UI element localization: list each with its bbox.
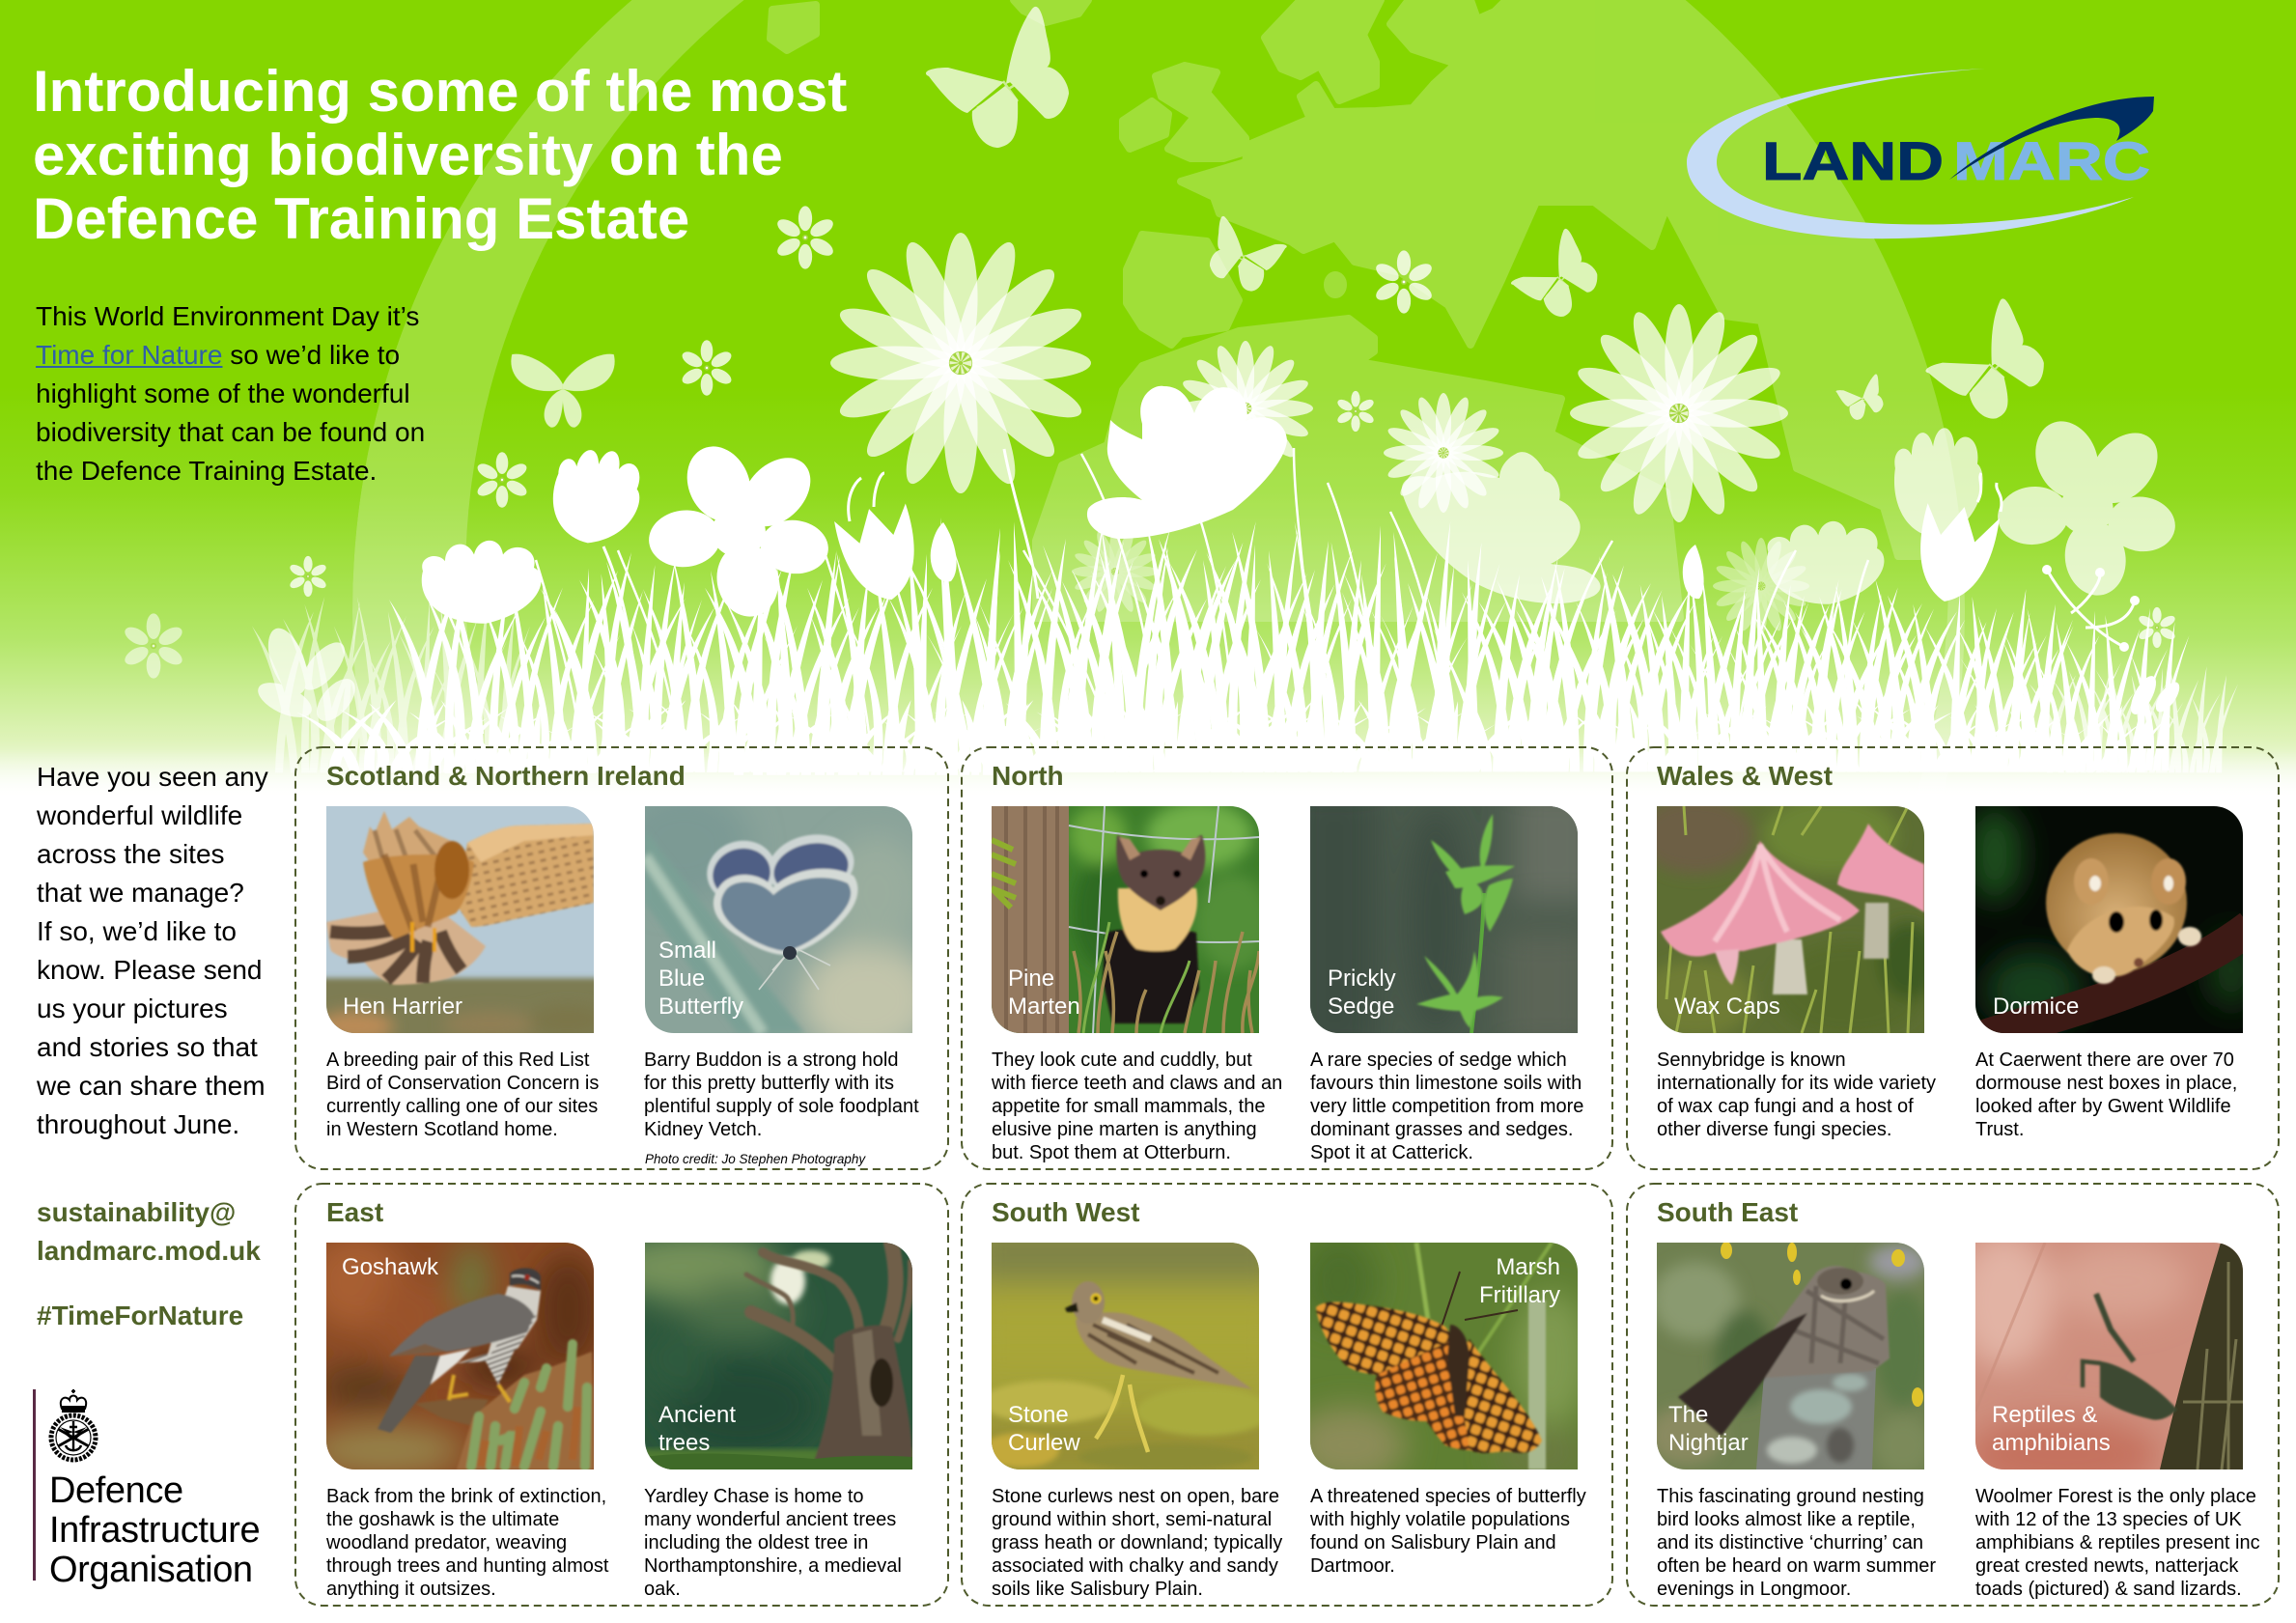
label: Wax Caps <box>1674 993 1780 1020</box>
description: Yardley Chase is home to <box>644 1486 864 1507</box>
panel: Scotland & Northern Ireland <box>294 746 2263 1170</box>
grass fade <box>0 748 2296 801</box>
Defence Infrastructure Organisation logo: Infrastructure <box>49 1510 260 1551</box>
label: Hen Harrier <box>343 993 462 1020</box>
Defence Infrastructure Organisation logo: Organisation <box>49 1550 253 1590</box>
title: Introducing some of the most <box>33 59 847 124</box>
small six-petal flowers <box>122 206 2177 679</box>
contact email: sustainability@ <box>37 1197 236 1227</box>
pale flowers <box>253 413 2180 728</box>
hero illustration <box>0 0 2296 792</box>
label: Nightjar <box>1668 1430 1749 1456</box>
description: They look cute and cuddly, but <box>992 1049 1252 1071</box>
description: woodland predator, weaving <box>326 1532 567 1553</box>
description: Northamptonshire, a medieval <box>644 1555 902 1577</box>
description <box>1310 1486 1586 1577</box>
description: with fierce teeth and claws and an <box>992 1073 1282 1094</box>
description: Back from the brink of extinction, <box>326 1486 606 1507</box>
description: elusive pine marten is anything <box>992 1119 1257 1140</box>
description: looked after by Gwent Wildlife <box>1975 1096 2231 1117</box>
call to action text: Have you seen any <box>37 762 268 792</box>
description <box>1657 1486 1936 1600</box>
description: often be heard on warm summer <box>1657 1555 1936 1577</box>
description <box>644 1486 902 1600</box>
title <box>33 59 847 251</box>
label: Reptiles & <box>1992 1402 2097 1428</box>
description: Stone curlews nest on open, bare <box>992 1486 1279 1507</box>
description <box>992 1486 1282 1600</box>
description: soils like Salisbury Plain. <box>992 1579 1203 1600</box>
description: At Caerwent there are over 70 <box>1975 1049 2234 1071</box>
description: Kidney Vetch. <box>644 1119 762 1140</box>
description: toads (pictured) & sand lizards. <box>1975 1579 2242 1600</box>
description: anything it outsizes. <box>326 1579 496 1600</box>
description: great crested newts, natterjack <box>1975 1555 2238 1577</box>
background gradient <box>0 0 2296 801</box>
label: Curlew <box>1008 1430 1080 1456</box>
photo: Wax Caps <box>1657 806 1924 1033</box>
description: A rare species of sedge which <box>1310 1049 1567 1071</box>
label <box>1008 1402 1080 1456</box>
intro text: biodiversity that can be found on <box>36 417 425 447</box>
description: appetite for small mammals, the <box>992 1096 1265 1117</box>
photo: Prickly Sedge <box>1310 806 1578 1033</box>
description: bird looks almost like a reptile, <box>1657 1509 1916 1530</box>
call to action text: us your pictures <box>37 993 228 1023</box>
call to action text: we can share them <box>37 1071 266 1101</box>
description: associated with chalky and sandy <box>992 1555 1278 1577</box>
description <box>1310 1049 1583 1163</box>
description: evenings in Longmoor. <box>1657 1579 1851 1600</box>
label: Prickly <box>1328 965 1396 992</box>
label: The <box>1668 1402 1708 1428</box>
photo: Ancient trees <box>645 1243 912 1469</box>
call to action text: know. Please send <box>37 955 263 985</box>
description: found on Salisbury Plain and <box>1310 1532 1556 1553</box>
photo: Nightjar <box>1657 1243 1924 1469</box>
photo: Stone Curlew <box>992 1243 1259 1469</box>
description <box>326 1486 608 1600</box>
label: Fritillary <box>1479 1282 1560 1308</box>
photo credit: Photo credit: Jo Stephen Photography <box>645 1152 865 1166</box>
panel: Wales & West <box>1626 746 2280 1170</box>
description: Barry Buddon is a strong hold <box>644 1049 898 1071</box>
description: and its distinctive ‘churring’ can <box>1657 1532 1923 1553</box>
label: Blue <box>658 965 705 992</box>
description: for this pretty butterfly with its <box>644 1073 894 1094</box>
label: Ancient <box>658 1402 736 1428</box>
description: dormouse nest boxes in place, <box>1975 1073 2237 1094</box>
description: the goshawk is the ultimate <box>326 1509 559 1530</box>
intro text <box>36 301 425 486</box>
call to action text: that we manage? <box>37 878 244 908</box>
label <box>658 937 743 1020</box>
label <box>1479 1254 1560 1308</box>
description: through trees and hunting almost <box>326 1555 608 1577</box>
description: in Western Scotland home. <box>326 1119 558 1140</box>
description <box>1975 1049 2237 1140</box>
description: favours thin limestone soils with <box>1310 1073 1582 1094</box>
intro text: This World Environment Day it’s <box>36 301 419 331</box>
Landmarc logo <box>1687 69 2154 238</box>
label <box>1668 1402 1749 1456</box>
panel: North <box>961 746 1613 1170</box>
heading: East <box>326 1197 383 1227</box>
hashtag: #TimeForNature <box>37 1301 243 1330</box>
description: but. Spot them at Otterburn. <box>992 1142 1231 1163</box>
panel: South East <box>1626 1183 2280 1607</box>
contact email: landmarc.mod.uk <box>37 1236 261 1266</box>
photo: Goshawk <box>326 1243 594 1469</box>
photo: Hen Harrier <box>326 806 594 1033</box>
Defence Infrastructure Organisation logo: Defence <box>49 1470 183 1511</box>
description: other diverse fungi species. <box>1657 1119 1891 1140</box>
intro text: highlight some of the wonderful <box>36 378 410 408</box>
description: Trust. <box>1975 1119 2024 1140</box>
call to action text: and stories so that <box>37 1032 258 1062</box>
heading: South West <box>992 1197 1139 1227</box>
label: trees <box>658 1430 710 1456</box>
globe with continents <box>352 0 1965 758</box>
call to action text <box>37 762 268 1445</box>
heading: North <box>992 761 1064 791</box>
intro text: Time for Nature so we’d like to <box>36 340 400 370</box>
label: Sedge <box>1328 993 1394 1020</box>
description: amphibians & reptiles present inc <box>1975 1532 2260 1553</box>
intro text: the Defence Training Estate. <box>36 456 377 486</box>
photo: Reptiles and amphibians <box>1975 1243 2243 1469</box>
call to action text: wonderful wildlife <box>37 800 242 830</box>
call to action text: across the sites <box>37 839 225 869</box>
label: Marten <box>1008 993 1080 1020</box>
call to action text: throughout June. <box>37 1109 239 1139</box>
description: Sennybridge is known <box>1657 1049 1846 1071</box>
contact email <box>37 1197 261 1266</box>
label: Butterfly <box>658 993 743 1020</box>
label: Small <box>658 937 716 964</box>
Landmarc logo: LAND <box>1762 130 1944 191</box>
description: with 12 of the 13 species of UK <box>1975 1509 2242 1530</box>
description: including the oldest tree in <box>644 1532 868 1553</box>
call to action text: If so, we’d like to <box>37 916 237 946</box>
description: This fascinating ground nesting <box>1657 1486 1924 1507</box>
Landmarc logo: MARC <box>1953 130 2150 191</box>
photo: Pine Marten <box>992 806 1259 1033</box>
description <box>1975 1485 2260 1601</box>
label <box>1992 1401 2111 1457</box>
label <box>1328 965 1396 1020</box>
description: Bird of Conservation Concern is <box>326 1073 599 1094</box>
description: Dartmoor. <box>1310 1555 1395 1577</box>
description: A threatened species of butterfly <box>1310 1486 1586 1507</box>
heading: South East <box>1657 1197 1798 1227</box>
heading: Wales & West <box>1657 761 1833 791</box>
description: very little competition from more <box>1310 1096 1583 1117</box>
panel: South West <box>961 1183 1613 1607</box>
label: Marsh <box>1496 1254 1560 1280</box>
description: oak. <box>644 1579 681 1600</box>
label: Pine <box>1008 965 1054 992</box>
photo: Marsh Fritillary <box>1310 1243 1578 1469</box>
description: plentiful supply of sole foodplant <box>644 1096 919 1117</box>
Defence Infrastructure Organisation logo <box>33 1389 260 1590</box>
description: of wax cap fungi and a host of <box>1657 1096 1914 1117</box>
description: grass heath or downland; typically <box>992 1532 1282 1553</box>
description: A breeding pair of this Red List <box>326 1049 589 1071</box>
label <box>1008 965 1080 1020</box>
title: exciting biodiversity on the <box>33 123 783 187</box>
daisy flowers <box>776 179 1834 655</box>
butterflies <box>511 7 2053 431</box>
label <box>658 1402 736 1456</box>
description <box>326 1049 599 1140</box>
description: internationally for its wide variety <box>1657 1073 1936 1094</box>
description <box>1657 1049 1936 1140</box>
label: Goshawk <box>342 1254 438 1280</box>
photo: Small Blue Butterfly <box>645 806 912 1033</box>
description: ground within short, semi-natural <box>992 1509 1272 1530</box>
grass <box>252 448 2238 775</box>
description: dominant grasses and sedges. <box>1310 1119 1573 1140</box>
panel: East <box>294 1183 949 1607</box>
description: many wonderful ancient trees <box>644 1509 896 1530</box>
description <box>992 1049 1282 1163</box>
description <box>644 1049 919 1140</box>
description: Woolmer Forest is the only place <box>1975 1486 2256 1507</box>
description: with highly volatile populations <box>1310 1509 1570 1530</box>
description: currently calling one of our sites <box>326 1096 598 1117</box>
description: Spot it at Catterick. <box>1310 1142 1473 1163</box>
title: Defence Training Estate <box>33 186 689 251</box>
label: Stone <box>1008 1402 1069 1428</box>
label: amphibians <box>1992 1430 2111 1456</box>
heading: Scotland & Northern Ireland <box>326 761 686 791</box>
label: Dormice <box>1993 993 2079 1020</box>
white flowers <box>422 386 2184 718</box>
photo: Dormice <box>1975 806 2243 1033</box>
